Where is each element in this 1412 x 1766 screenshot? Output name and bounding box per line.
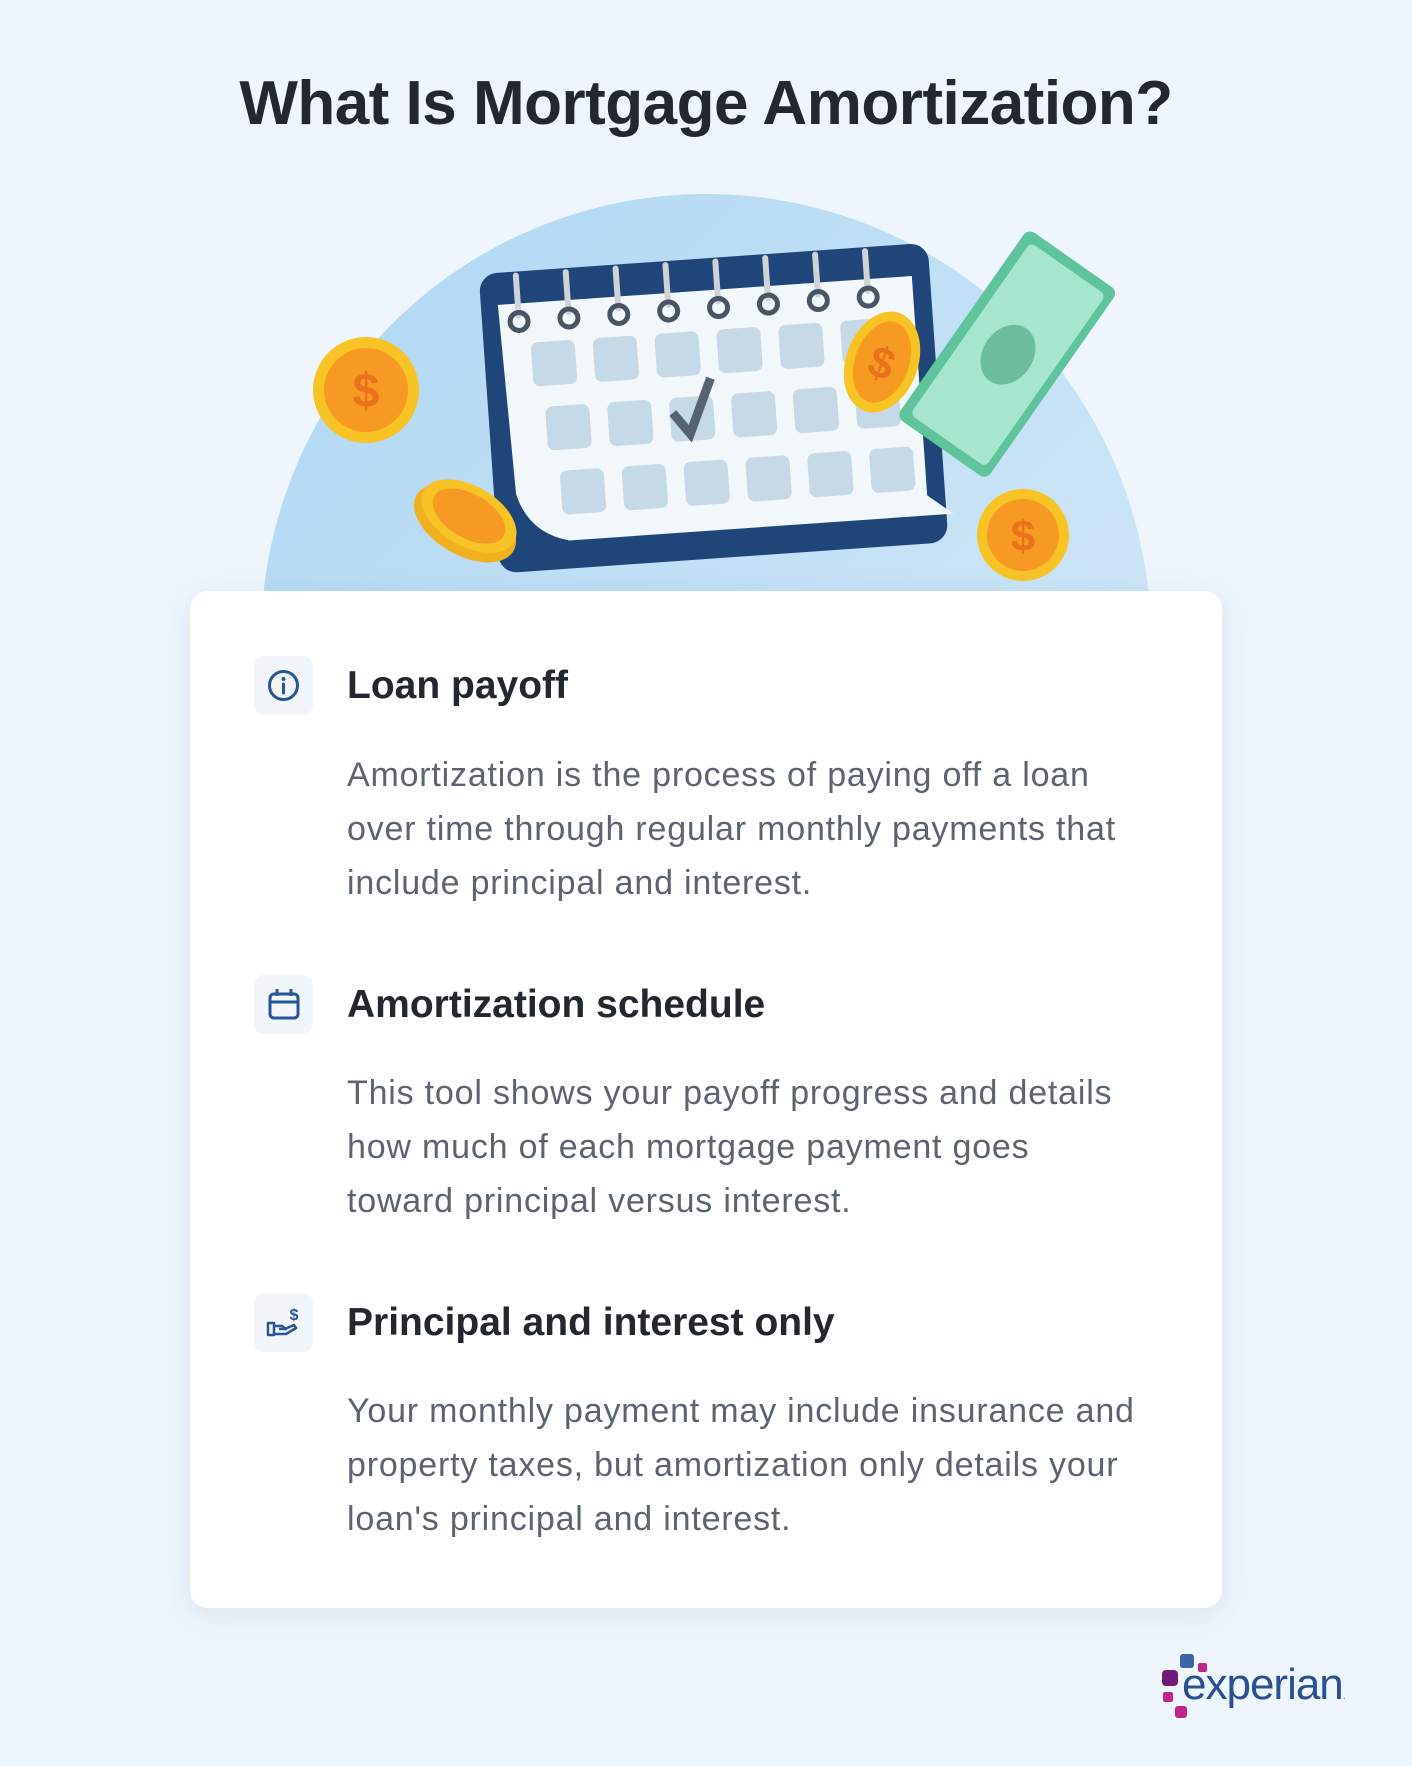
text: amortization schedule: This tool shows your payoff progress and details xyxy=(347,1074,1112,1112)
illustration: calendar with coins and money xyxy=(313,232,1115,581)
money bill xyxy=(896,228,1118,480)
coins xyxy=(313,337,419,443)
text: principal and interest only: property taxes, but amortization only details your xyxy=(347,1446,1118,1484)
coins: $ xyxy=(353,365,380,418)
heading: amortization schedule: Amortization schedule xyxy=(347,983,765,1026)
icon: hand with dollar: $ xyxy=(290,1307,299,1324)
logo: experian xyxy=(1162,1654,1345,1718)
heading: principal and interest only: Principal and interest only xyxy=(347,1301,835,1344)
text: principal and interest only: loan's principal and interest. xyxy=(347,1500,791,1538)
icon: info xyxy=(254,656,313,715)
text: amortization schedule: how much of each mortgage payment goes xyxy=(347,1128,1029,1166)
heading: loan payoff: Loan payoff xyxy=(347,664,568,707)
illustration: calendar with coins and money: $ xyxy=(1011,512,1035,561)
logo: experian: experian. xyxy=(1182,1660,1345,1709)
illustration: calendar with coins and money: $ xyxy=(862,336,901,391)
icon: calendar xyxy=(254,975,313,1034)
text: principal and interest only: Your monthly payment may include insurance and xyxy=(347,1392,1135,1430)
text: loan payoff: Amortization is the process of paying off a loan xyxy=(347,756,1090,794)
text: amortization schedule: toward principal versus interest. xyxy=(347,1182,852,1220)
text: amortization schedule xyxy=(347,1074,1112,1220)
panel: info card xyxy=(190,591,1222,1608)
background semicircle xyxy=(264,194,1148,591)
calendar xyxy=(479,242,955,573)
title: What Is Mortgage Amortization? xyxy=(239,69,1173,138)
text: loan payoff: include principal and interest. xyxy=(347,864,812,902)
text: loan payoff xyxy=(347,756,1116,902)
text: principal and interest only xyxy=(347,1392,1135,1538)
icon: hand with dollar xyxy=(254,1293,313,1352)
text: loan payoff: over time through regular monthly payments that xyxy=(347,810,1116,848)
